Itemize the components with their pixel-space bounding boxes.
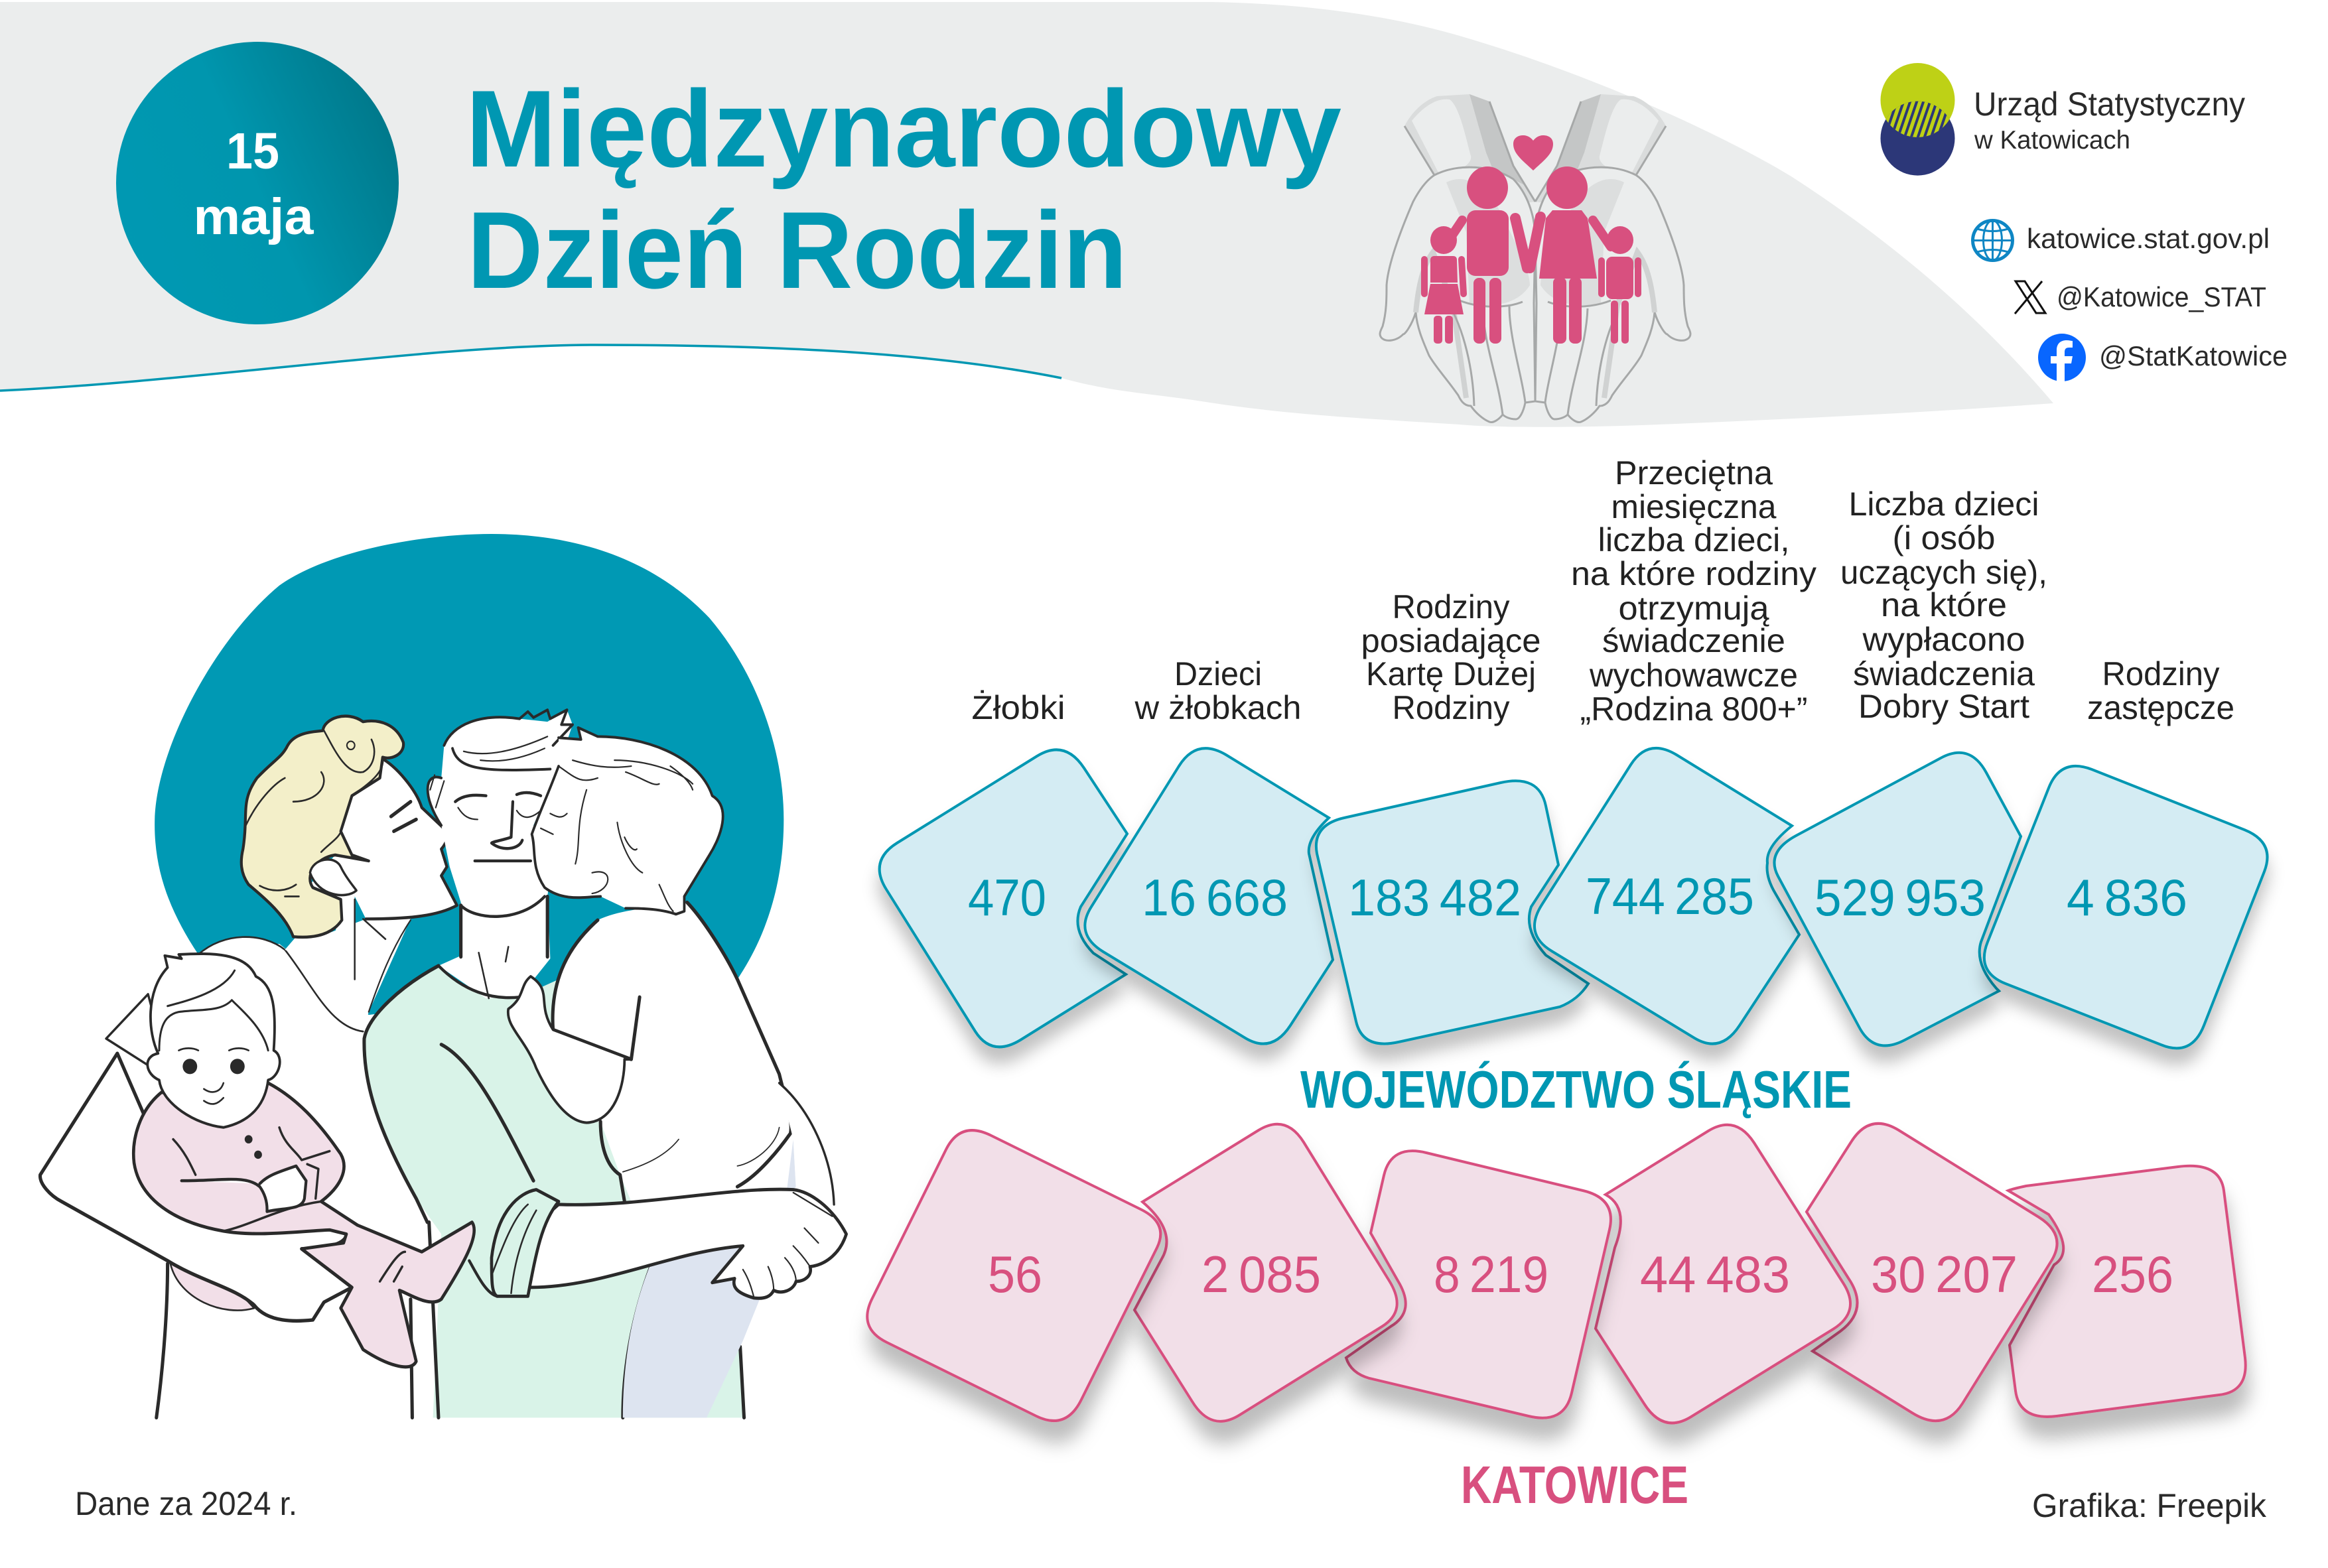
website contact [1973,220,2270,261]
header background [0,2,2053,427]
card: 744 285: 744 285 [1586,867,1754,925]
card: 2 085 [1134,1124,1397,1421]
card: 470 [880,750,1127,1047]
card: 529 953 [1774,753,2021,1045]
card: 56: 56 [988,1245,1042,1303]
card: 30 207 [1807,1124,2057,1421]
boy body [508,902,791,1201]
column labels: liczba dzieci, [1598,521,1790,558]
father head [428,710,573,998]
card: 470: 470 [968,868,1046,927]
baby body [40,994,474,1367]
column labels: Liczba dzieci [1848,486,2039,523]
section heading: Katowice: KATOWICE [1461,1455,1688,1514]
footnote: graphic credit: Grafika: Freepik [2032,1487,2267,1524]
column labels: w żłobkach [1134,689,1302,726]
card: 4 836: 4 836 [2067,868,2187,927]
column labels: (i osób [1892,519,1996,556]
footnote: data year: Dane za 2024 r. [75,1485,297,1522]
card: 183 482: 183 482 [1348,868,1521,927]
logo: Urząd Statystyczny [1878,63,2245,176]
title: Dzień Rodzin [467,189,1127,311]
logo: Urząd Statystyczny: Urząd Statystyczny [1974,86,2245,123]
card: 30 207: 30 207 [1871,1245,2018,1303]
column labels: Rodziny [1392,588,1510,625]
column labels: na które rodziny [1571,555,1816,592]
column labels: otrzymują [1619,590,1769,627]
card: 183 482 [1316,781,1588,1044]
column labels: Żłobki [971,689,1065,726]
card: 4 836 [1984,766,2268,1048]
date badge: 15 [226,123,279,180]
card: 16 668 [1085,748,1333,1044]
mother torso [40,919,436,1417]
illustration: family [40,534,847,1417]
blue data cards [880,748,2268,1048]
mother head [241,716,457,980]
column labels: posiadające [1361,622,1541,659]
section heading: województwo: WOJEWÓDZTWO ŚLĄSKIE [1300,1060,1852,1119]
column labels [971,454,2234,728]
date badge: maja [194,188,314,245]
column labels: Rodziny [2102,655,2220,692]
date badge [116,42,399,324]
card: 529 953: 529 953 [1814,868,1986,927]
card: 744 285 [1535,748,1799,1044]
Facebook contact: @StatKatowice [2099,340,2288,371]
column labels: Kartę Dużej [1366,655,1536,692]
card: 16 668: 16 668 [1142,868,1288,927]
column labels: wychowawcze [1589,657,1798,694]
boy head [532,728,723,914]
title [466,68,1341,311]
card: 44 483: 44 483 [1640,1245,1790,1303]
father arms [469,1083,847,1298]
column labels: wypłacono [1862,621,2025,658]
column labels: miesięczna [1611,488,1777,525]
card: 56 [867,1130,1160,1421]
X contact: @Katowice_STAT [2057,281,2266,312]
column labels: świadczenia [1853,655,2035,692]
header wave line [0,345,1061,391]
boy legs [623,1140,796,1417]
father shirt [364,966,744,1417]
teal blob [155,534,784,1015]
card: 2 085: 2 085 [1201,1245,1321,1303]
website contact: katowice.stat.gov.pl [2027,223,2270,254]
column labels: Dzieci [1174,655,1262,692]
pink data cards [867,1124,2246,1423]
column labels: Dobry Start [1858,688,2029,725]
column labels: świadczenie [1602,622,1785,659]
column labels: zastępcze [2087,689,2234,726]
card: 8 219 [1346,1151,1611,1418]
Facebook contact [2038,334,2288,381]
card: 256: 256 [2092,1245,2173,1303]
column labels: na które [1881,586,2007,623]
icon: family in hands [1380,94,1690,423]
title: Międzynarodowy [466,68,1341,190]
card: 8 219: 8 219 [1434,1245,1548,1303]
card: 256 [2008,1166,2246,1417]
column labels: „Rodzina 800+” [1580,690,1807,728]
column labels: uczących się), [1840,554,2047,591]
column labels: Rodziny [1392,689,1510,726]
logo: Urząd Statystyczny: w Katowicach [1974,126,2130,155]
column labels: Przeciętna [1615,454,1773,491]
card: 44 483 [1596,1125,1850,1423]
baby head [147,954,280,1128]
